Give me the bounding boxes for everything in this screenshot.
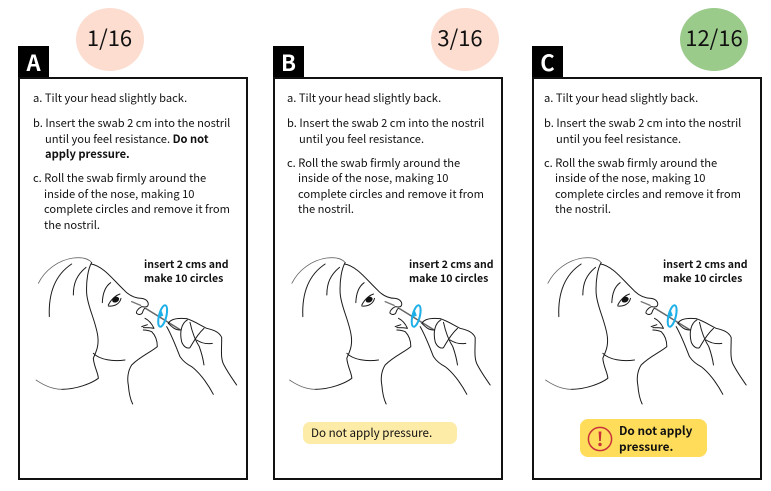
caption: panel B figure: make 10 circles (409, 270, 488, 286)
illustration: panel B swab figure (289, 258, 490, 404)
panel: C frame (532, 77, 762, 480)
label tab C: C (540, 46, 555, 78)
text block: panel C instructions: a. Tilt your head slightly back. (544, 90, 698, 106)
score circle A: 1/16 (87, 20, 132, 52)
score circle B: 3/16 (437, 20, 483, 52)
text block: panel A instructions: apply pressure. (45, 146, 130, 162)
text block: panel B instructions: inside of the nose, making 10 (298, 170, 448, 186)
text block: panel B instructions: a. Tilt your head slightly back. (287, 90, 441, 106)
text block: panel B instructions: c. Roll the swab firmly around the (287, 155, 460, 171)
warning text: pressure. (619, 438, 673, 455)
caption: panel C figure: insert 2 cms and (663, 257, 748, 272)
score circle C (680, 8, 748, 70)
score circle B (431, 8, 499, 70)
text block: panel C instructions: inside of the nose, making 10 (555, 170, 705, 186)
warning text: Do not apply (619, 422, 692, 439)
text block: panel A instructions: the nostril. (44, 216, 100, 232)
caption: panel C figure: make 10 circles (663, 270, 742, 286)
panel: B frame (273, 77, 503, 480)
panel: A frame (18, 77, 248, 480)
score circle A (76, 8, 144, 70)
text block: panel A instructions: until you feel resistance. Do not (45, 130, 209, 146)
text block: panel A instructions (33, 90, 230, 232)
text block: panel C instructions: complete circles and remove it from (555, 186, 741, 202)
text block: panel B instructions (287, 90, 484, 217)
text block: panel A instructions: inside of the nose, making 10 (44, 186, 194, 202)
text block: panel A instructions: complete circles and remove it from (44, 201, 230, 217)
callout: panel C pressure warning (580, 419, 707, 457)
text block: panel C instructions: until you feel resistance. (556, 130, 681, 146)
text block: panel B instructions: b. Insert the swab 2 cm into the nostril (287, 115, 484, 131)
icon: exclamation in circle (588, 426, 612, 452)
caption: panel A figure: make 10 circles (144, 270, 223, 286)
text block: panel C instructions (544, 90, 741, 217)
illustration: panel A swab figure (36, 258, 237, 404)
text block: panel C instructions: the nostril. (555, 201, 611, 217)
text block: panel C instructions: c. Roll the swab firmly around the (544, 155, 717, 171)
illustration: panel C swab figure (545, 258, 746, 404)
caption: panel A figure (144, 257, 228, 286)
caption: panel A figure: insert 2 cms and (144, 257, 228, 272)
label tab C (532, 46, 563, 77)
score circle C: 12/16 (685, 20, 743, 52)
label tab A: A (26, 46, 41, 78)
text block: panel B instructions: the nostril. (298, 201, 354, 217)
text block: panel A instructions: c. Roll the swab firmly around the (33, 170, 206, 186)
label tab B: B (281, 46, 296, 78)
text block: panel B instructions: until you feel resistance. (299, 130, 424, 146)
label tab A (18, 46, 49, 77)
text block: panel B instructions: complete circles and remove it from (298, 186, 484, 202)
label tab B (273, 46, 304, 77)
text block: panel A instructions: b. Insert the swab 2 cm into the nostril (33, 115, 230, 131)
warning text (619, 422, 692, 455)
text block: panel C instructions: b. Insert the swab 2 cm into the nostril (544, 115, 741, 131)
caption: panel B figure (409, 257, 494, 286)
caption: panel B figure: insert 2 cms and (409, 257, 494, 272)
text block: panel A instructions: a. Tilt your head slightly back. (33, 90, 187, 106)
callout: panel B pressure note: Do not apply pressure. (311, 425, 432, 441)
callout: panel B pressure note (303, 422, 457, 444)
caption: panel C figure (663, 257, 748, 286)
